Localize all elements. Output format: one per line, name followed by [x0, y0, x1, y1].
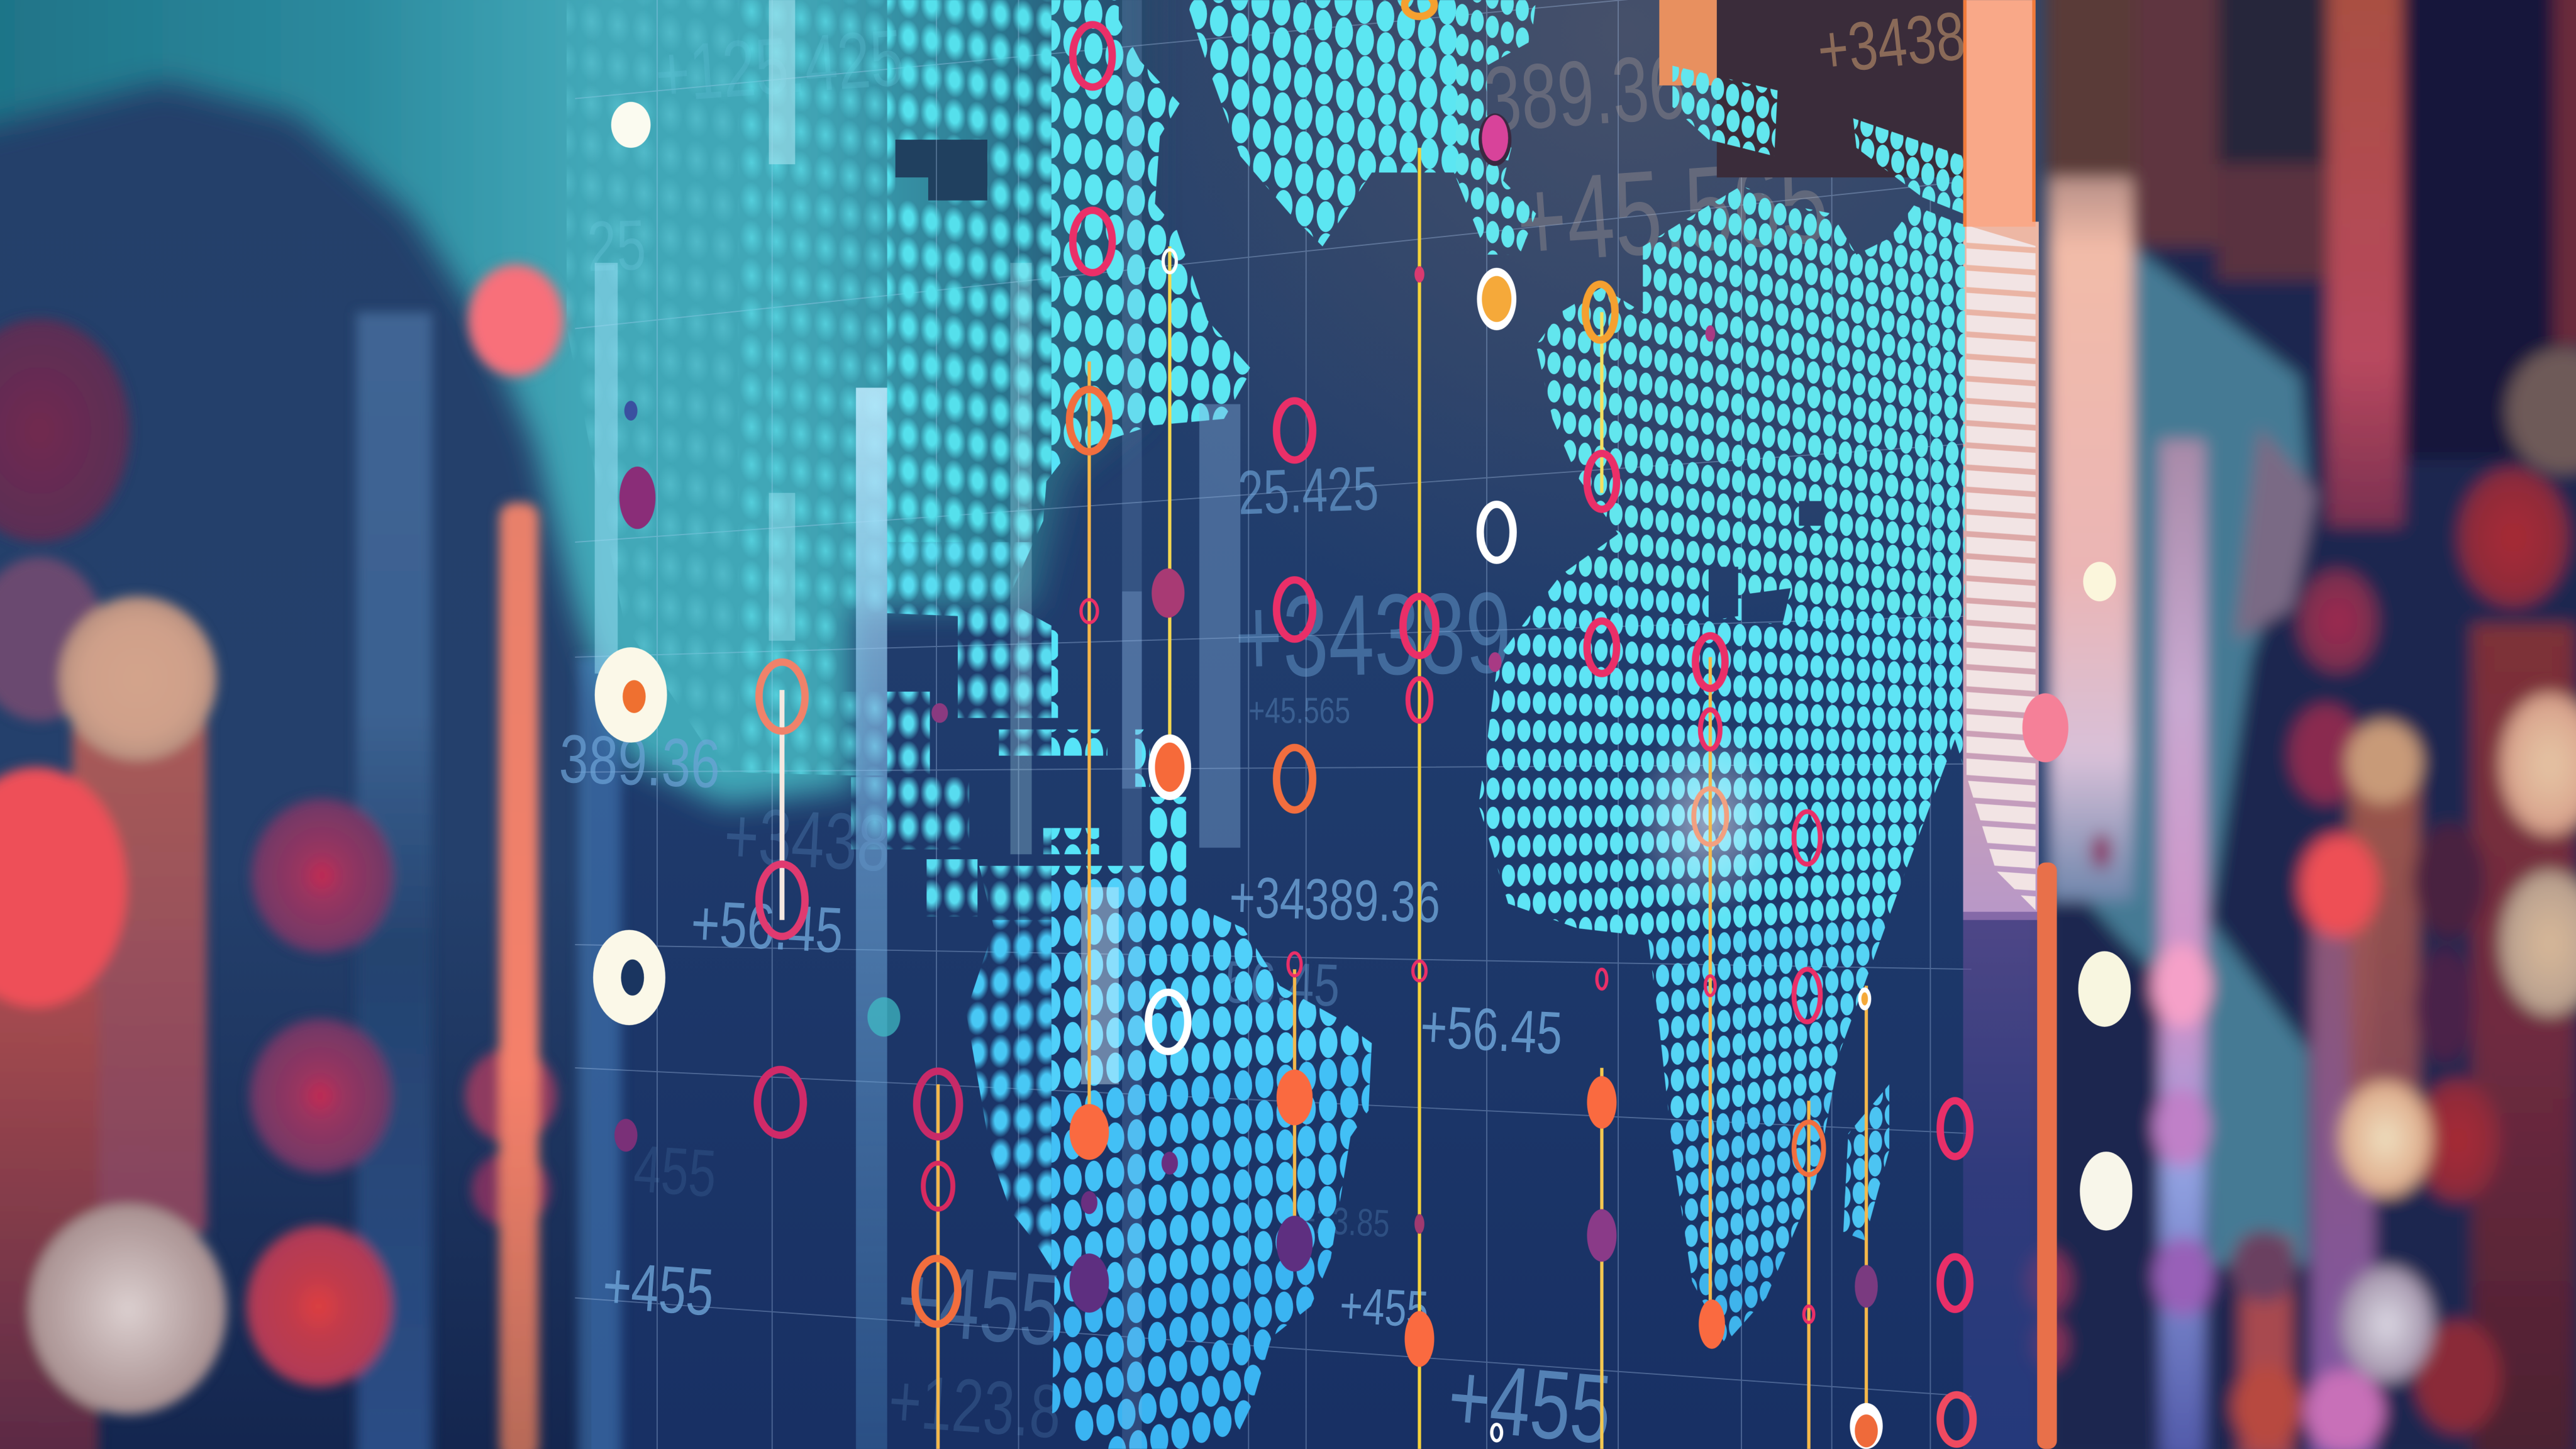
orange bar top centre and dark panel [1659, 0, 1963, 177]
right thin orange bar [2037, 862, 2057, 1449]
pale stripes right [1967, 222, 2036, 920]
sharp dots west [1052, 0, 1462, 1449]
number: 389.36 top: 389.36 [1481, 35, 1689, 151]
top centre warm tone [1002, 0, 2251, 641]
left cylinders [0, 557, 105, 721]
translucent light bars in front of map [595, 0, 1790, 1449]
number: 45.565: +45.565 [1248, 690, 1350, 731]
tall red bars [2472, 625, 2574, 1449]
right side blurred field [2024, 0, 2576, 1449]
dotted world map [567, 0, 2037, 1449]
number: 25: 25 [586, 206, 647, 287]
number: 45.565 top: +45.565 [1512, 133, 1832, 289]
orange filled markers [1070, 1070, 1725, 1367]
blue translucent bars [357, 312, 432, 1449]
dark right backdrop [2045, 0, 2576, 1449]
number: +125.42: +125.425 [652, 13, 906, 119]
magenta filled markers [931, 113, 1878, 1313]
orange bar top right [1963, 0, 2036, 226]
pink vertical bar [2160, 440, 2205, 1449]
blurred bokeh lights right [2460, 468, 2568, 606]
sharp dots east [1462, 0, 2037, 1443]
yellow data lines [782, 148, 1867, 1449]
red top bar [2328, 0, 2402, 526]
teal right continent [2062, 247, 2308, 1265]
number: +56.45 right: +56.45 [1419, 992, 1564, 1067]
number: 25.425: 25.425 [1237, 453, 1380, 528]
white ring markers [1148, 250, 1513, 1441]
number: +34389.36: +34389.36 [1228, 865, 1441, 935]
soft dots middle [887, 0, 1052, 542]
number: +455: +455 [600, 1248, 716, 1330]
number: 23.85: +23.85 [1297, 1197, 1391, 1245]
left orange bar [499, 502, 539, 1449]
purple band below pale zone [1963, 912, 2039, 1449]
hudson bay dark water [896, 140, 987, 201]
pale pink wall [2048, 177, 2133, 901]
number: 389.36 left: 389.36 [558, 720, 721, 802]
number: 56.45 mid: 56.45 [1223, 948, 1341, 1019]
number: +56.45 left: +56.45 [689, 887, 845, 967]
soft dots far left [567, 0, 740, 887]
number: +34389 large: +34389 [1234, 568, 1512, 701]
white markers with filled centres [593, 268, 1883, 1449]
soft dots semi [740, 0, 887, 887]
left background field [0, 0, 591, 1449]
bokeh lights left [0, 319, 130, 542]
number: +3438 mid left: +3438 [722, 791, 892, 888]
faint data numbers [558, 453, 1616, 1449]
number: 455 low left: 455 [631, 1131, 719, 1211]
map grid lines [575, 0, 1972, 1449]
number: +455 mid: +455 [894, 1242, 1064, 1367]
number: +455 small: +455 [1338, 1277, 1430, 1338]
blurred teal continent [0, 0, 1150, 805]
soft markers beside map [611, 102, 2133, 1231]
teal soft dot [867, 997, 901, 1036]
numbers on teal [586, 13, 906, 287]
pink ring markers [757, 25, 1973, 1444]
orange ring markers [759, 0, 1824, 1324]
left side blurred field [0, 265, 621, 1449]
pale stripes zone base [1963, 222, 2039, 920]
